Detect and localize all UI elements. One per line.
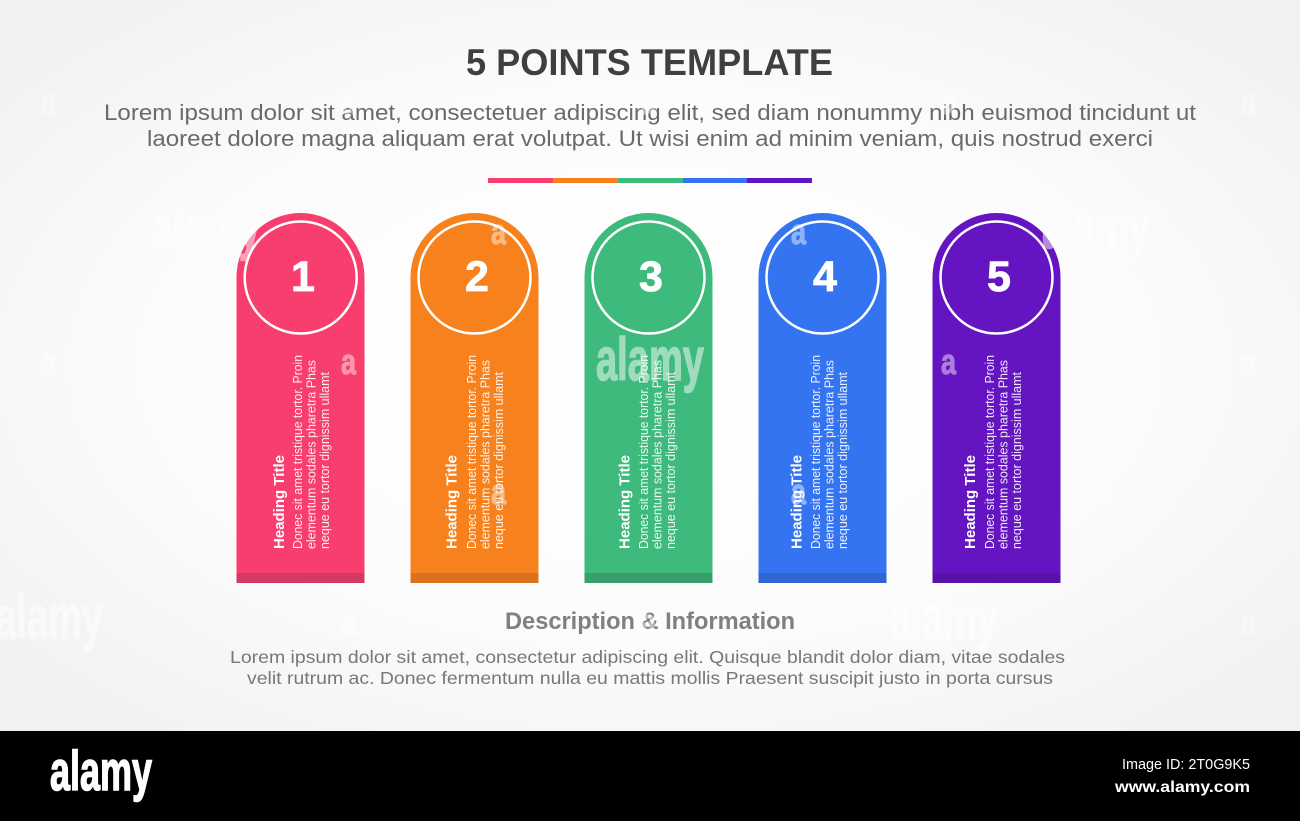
footer bar	[0, 731, 1300, 821]
watermarks: a	[491, 471, 507, 512]
panel: point 5: elementum sodales pharetra Phas	[996, 360, 1010, 549]
watermarks: a	[1241, 81, 1257, 122]
panel: point 1: elementum sodales pharetra Phas	[304, 360, 318, 549]
panel: point 5: Heading Title	[962, 455, 979, 549]
colour divider bar	[488, 178, 812, 183]
watermarks: a	[1091, 471, 1107, 512]
panel: point 4	[758, 213, 886, 583]
watermarks	[0, 81, 1257, 651]
watermarks: a	[341, 341, 357, 382]
panel: point 2	[410, 213, 538, 583]
website: www.alamy.com	[1114, 779, 1250, 796]
watermarks: a	[641, 81, 657, 122]
watermarks: a	[791, 211, 807, 252]
panel: point 4: Donec sit amet tristique tortor. Proin	[808, 355, 823, 549]
panel: point 4: elementum sodales pharetra Phas	[822, 360, 836, 549]
panel: point 2: Heading Title	[444, 455, 460, 549]
watermarks: a	[341, 81, 357, 122]
panel: point 5	[932, 213, 1060, 583]
image id: Image ID: 2T0G9K5	[1122, 756, 1250, 773]
panel: point 3: Heading Title	[616, 455, 634, 549]
watermarks: a	[41, 81, 57, 122]
watermarks: a	[941, 341, 957, 382]
title: 5 POINTS TEMPLATE	[466, 42, 833, 83]
watermarks: a	[341, 601, 357, 642]
panel: point 1: Donec sit amet tristique tortor. Proin	[290, 355, 305, 549]
watermarks: alamy	[0, 584, 103, 651]
panel: point 1: neque eu tortor dignissim ullamt	[317, 372, 332, 549]
watermarks: a	[791, 471, 807, 512]
description heading: Description & Information	[505, 608, 795, 635]
panel: point 5: neque eu tortor dignissim ullamt	[1009, 372, 1024, 549]
panel: point 2: neque eu tortor dignissim ullamt	[491, 372, 506, 549]
panel: point 3	[584, 213, 712, 583]
footer logo: alamy	[50, 739, 152, 802]
description text: Lorem ipsum dolor sit amet, consectetur adipiscing elit. Quisque blandit dolor diam, vitae sodales	[230, 647, 1065, 667]
panel: point 2: elementum sodales pharetra Phas	[478, 360, 492, 549]
description text: velit rutrum ac. Donec fermentum nulla eu mattis mollis Praesent suscipit justo in porta cursus	[247, 668, 1053, 688]
subtitle: Lorem ipsum dolor sit amet, consectetuer adipiscing elit, sed diam nonummy nibh euismod tincidunt ut	[104, 100, 1196, 125]
watermarks: alamy	[596, 326, 704, 393]
panel: point 3: neque eu tortor dignissim ullamt	[663, 372, 678, 549]
panel: point 3: Donec sit amet tristique tortor. Proin	[636, 355, 651, 549]
panel: point 4: neque eu tortor dignissim ullamt	[835, 372, 850, 549]
panel: point 4: Heading Title	[788, 455, 806, 549]
panel: point 5: 5	[987, 253, 1011, 301]
watermarks: a	[191, 471, 207, 512]
panel: point 4: 4	[813, 253, 837, 301]
watermarks: a	[1241, 341, 1257, 382]
description text	[230, 647, 1065, 688]
panel: point 1: 1	[291, 253, 315, 301]
panel: point 2: Donec sit amet tristique tortor. Proin	[464, 355, 479, 549]
panel: point 3: 3	[639, 253, 663, 301]
panel: point 1: Heading Title	[271, 455, 288, 549]
watermarks: a	[941, 81, 957, 122]
watermarks: a	[491, 211, 507, 252]
panel: point 2: 2	[465, 253, 489, 301]
panel: point 1	[236, 213, 364, 583]
subtitle	[104, 100, 1196, 151]
watermarks: alamy	[1042, 194, 1150, 261]
panel: point 5: Donec sit amet tristique tortor. Proin	[982, 355, 997, 549]
watermarks: alamy	[890, 584, 998, 651]
watermarks: a	[41, 341, 57, 382]
watermarks: a	[641, 601, 657, 642]
subtitle: laoreet dolore magna aliquam erat volutpat. Ut wisi enim ad minim veniam, quis nostrud exerci	[147, 126, 1153, 151]
watermarks: a	[1241, 601, 1257, 642]
watermarks: alamy	[152, 194, 260, 261]
panel: point 3: elementum sodales pharetra Phas	[650, 360, 664, 549]
